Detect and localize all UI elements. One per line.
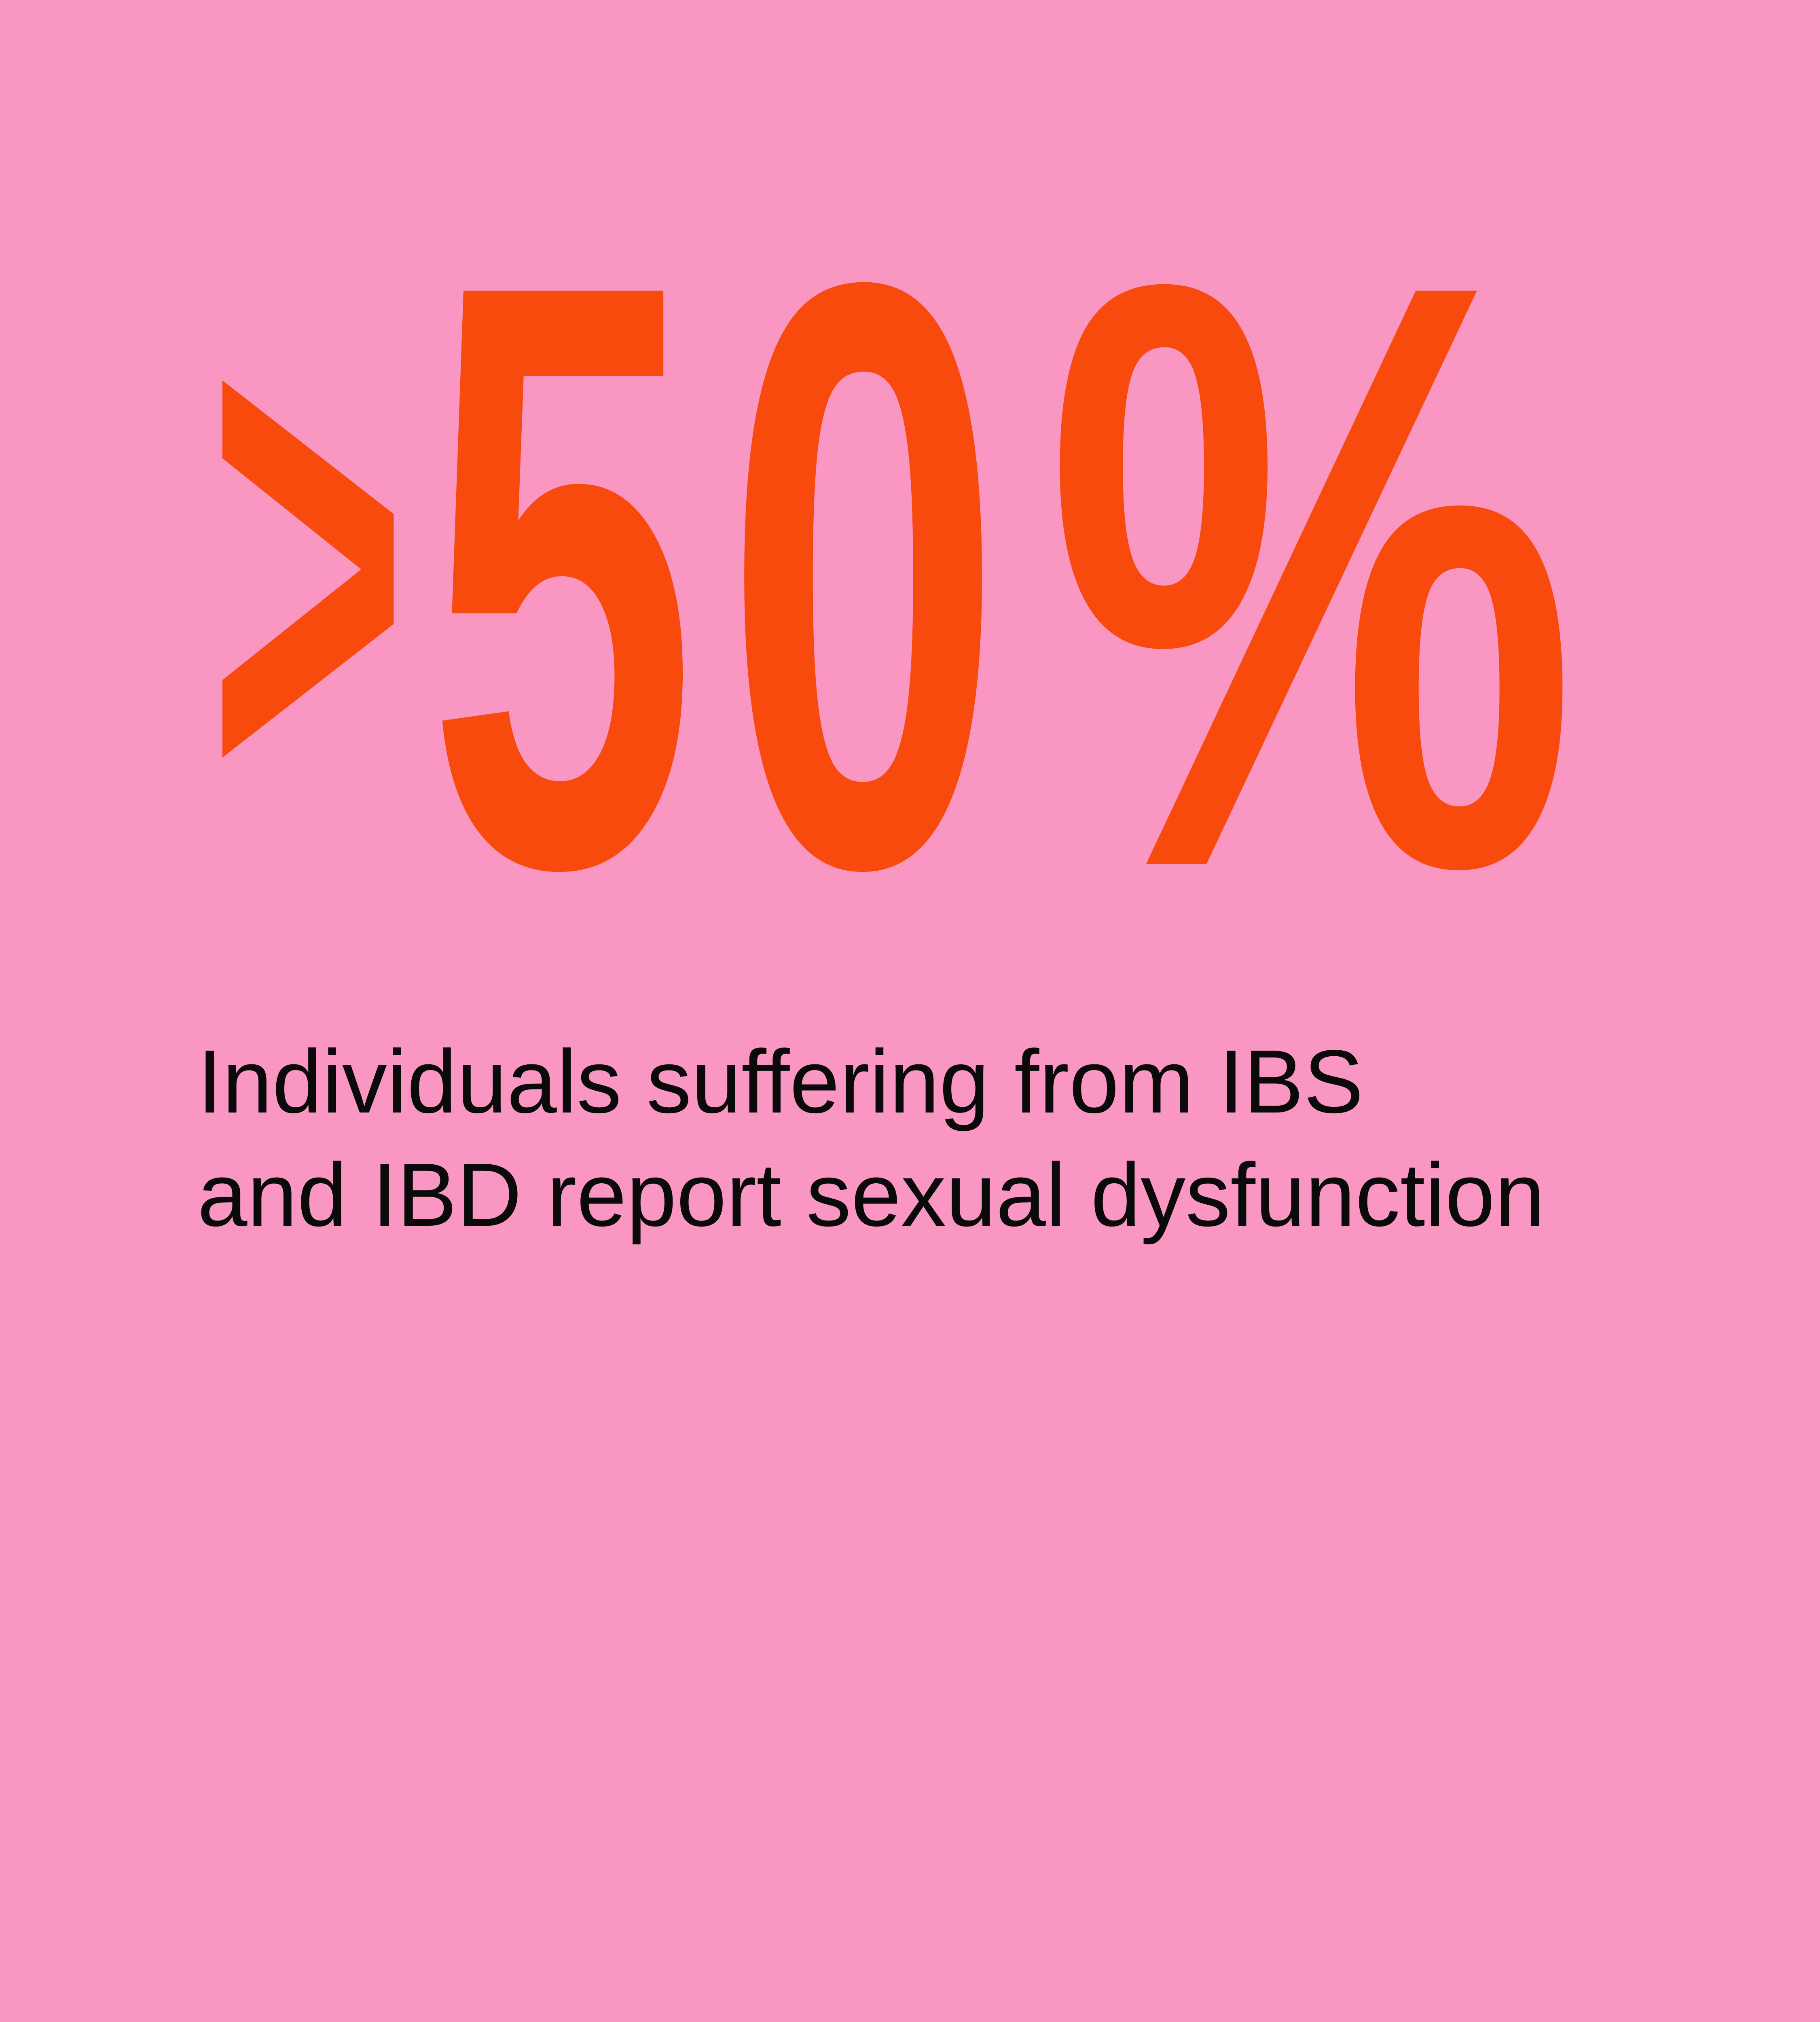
headline statistic: >50%: > [208, 167, 408, 930]
headline statistic: >50% [0, 0, 1820, 930]
subtitle text: Individuals suffering from IBS [197, 1032, 1363, 1132]
subtitle text: and IBD report sexual dysfunction [197, 1145, 1545, 1245]
subtitle text [197, 1025, 1545, 1252]
